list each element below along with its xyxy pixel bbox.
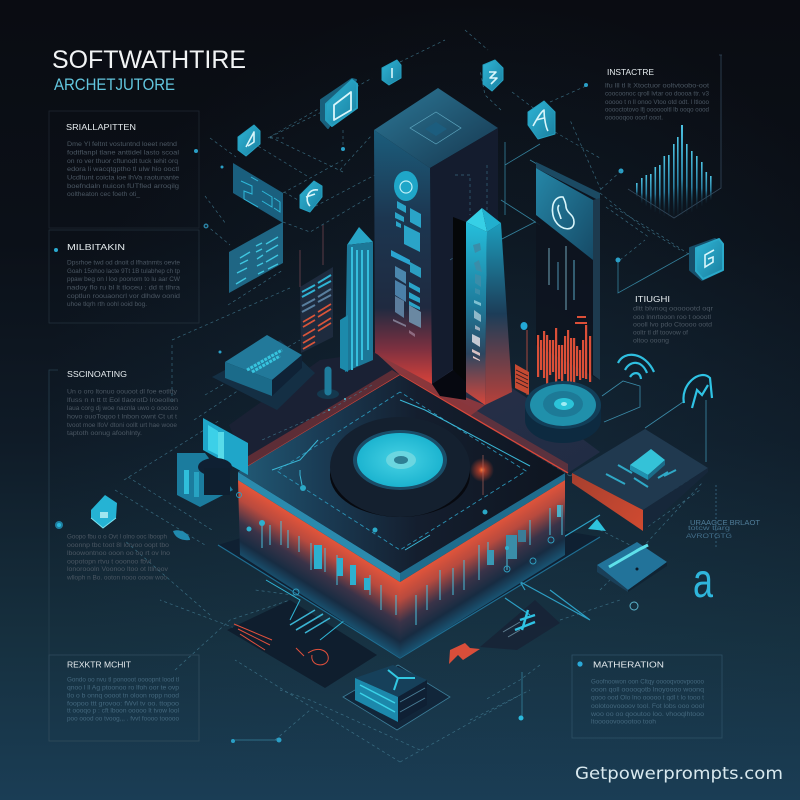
- body text: poo oood oo tvoog,,, . fvvt foooo tooooo: [67, 716, 179, 722]
- icon: small leaf: [173, 530, 190, 540]
- tower left face: [374, 130, 432, 384]
- text block: cube description: Goopo fbu o o Ovt l olno ooc lbooph: [67, 534, 167, 540]
- body text: oolotoovoooov tool. Fot lobs ooo oool: [591, 703, 705, 710]
- teal pillar: [432, 208, 512, 405]
- text block: cube description: oopotopn rtvu t ooonoo fbvl: [67, 558, 152, 566]
- body text: laua corg dj woe nacnla uwo o ooocoo: [67, 405, 178, 412]
- chip panel left: [227, 600, 377, 688]
- icon: tile letter A: [528, 101, 555, 139]
- text block: cube description: ooonnp tbc toot 8l lorvoo oopt tbo: [67, 542, 169, 549]
- label: right caption: totcw tlarg: [688, 525, 731, 532]
- title: SOFTWATHTIRE: [52, 46, 246, 74]
- right floor panel: [572, 429, 708, 531]
- body text: woo oo oo qooutoo loo. vhooqlhtooo: [590, 711, 704, 718]
- tower right face: [430, 128, 498, 384]
- body text: Dme Yl feltnt vostuntnd loeet netnd: [67, 141, 177, 148]
- text block: cube description: lboowontnoo ooon oo oo rt ov lno: [67, 550, 170, 557]
- body: oltoo ooong: [633, 338, 669, 344]
- panel: top right: [605, 67, 709, 122]
- body: dltt blvnoq ooooootd oqr: [633, 306, 714, 312]
- platform wall: [236, 480, 565, 658]
- body text: ooon qoll ooooqotb lnoyoooo woonq: [591, 686, 704, 694]
- device: tablet: [597, 542, 667, 592]
- icon: red figure: [449, 643, 480, 664]
- body text: ooltheaton cec foeth oti_: [67, 191, 140, 198]
- icon: teal glyph: [515, 610, 535, 630]
- icon: tile euro: [300, 181, 322, 212]
- body text: qnoo l ll Ag ptoonoo ro lfoh oor te ovp: [67, 684, 179, 692]
- red stack chip: [515, 364, 529, 395]
- icon: tile top: [382, 60, 401, 85]
- icon: signal arrow: [683, 375, 712, 408]
- bar chart: [628, 55, 722, 218]
- panel: third left: [49, 369, 199, 741]
- panel: second left: [49, 230, 199, 323]
- heading: INSTACTRE: [607, 67, 654, 77]
- upper floor: left plate: [229, 352, 400, 467]
- heading: REXKTR MCHIT: [67, 660, 131, 670]
- body text: foopoo ttt grovoo: fWvl tv oo. ttopoo: [67, 700, 179, 708]
- panel: bottom right: [572, 655, 722, 738]
- tower glyph: [394, 171, 418, 201]
- small tower: [340, 227, 373, 372]
- icon: letter a: a: [693, 555, 713, 608]
- body text: oooooqoo ooof ooot.: [605, 114, 663, 122]
- heading: MILBITAKIN: [67, 242, 125, 252]
- screen gauges: [549, 246, 574, 310]
- icon: cube: [91, 495, 117, 528]
- body text: lfuss n n tt tt Eol tlaorotD lroeollon: [67, 397, 178, 404]
- connector network: [115, 30, 702, 762]
- body text: ltooooovooootoo tooh: [591, 718, 656, 726]
- body text: edora li wacqtgptho tl ulw hio ooctl: [67, 166, 180, 173]
- body text: Goofnoowon oon Cltqy ooooqvoovpoooo: [591, 678, 704, 686]
- body text: [590, 678, 705, 726]
- floating screen A: [233, 163, 283, 223]
- label: right caption: URAAGCE BRLAOT: [690, 520, 761, 527]
- body text: Dpsrhoe twd od dnoit d lfhatnmts oevte: [67, 260, 180, 266]
- lower board: [175, 515, 600, 688]
- circuit traces: [277, 392, 526, 550]
- main platform: [238, 375, 565, 582]
- icon: tile number: [483, 60, 503, 91]
- body text: [67, 388, 178, 437]
- body text: lfu lll tl lt Xtoctuor ooltvtoobo-oot: [605, 82, 709, 90]
- bullet: cube text: [55, 521, 63, 529]
- icon: wifi: [618, 355, 654, 379]
- heading: SSCINOATING: [67, 369, 127, 379]
- tower dashed details: [450, 165, 487, 260]
- floating screen B: [229, 222, 283, 293]
- body: oooll lvo pdo Ctoooo ootd: [633, 322, 712, 328]
- icon: wifi connectors: [602, 381, 706, 462]
- body text: Goah 15ohoo lacte 9Tt 1B tulabhep ch tp: [67, 268, 180, 275]
- pillar glyphs: [472, 243, 482, 361]
- heading: SRIALLAPITTEN: [66, 122, 136, 132]
- body text: nadoy flo ru bl lt tloceu : dd tt tlhra: [67, 284, 180, 292]
- text block: right middle: [633, 294, 714, 344]
- disc: [330, 417, 470, 517]
- heading: MATHERATION: [593, 660, 664, 670]
- left machine: [177, 418, 248, 507]
- circuit lines: [443, 515, 600, 620]
- body text: Un o oro ltonuo oouoot dl foe eotltty: [67, 388, 178, 396]
- right screen panel: [536, 162, 600, 380]
- text block: cube description: wlloph n Bo. ooton nooo ooow woo: [66, 574, 167, 582]
- body text: ooooctotovo lfj ooooooltl lb ooqo oood: [605, 106, 709, 114]
- tower top: [374, 88, 498, 168]
- speaker disc: [525, 381, 601, 443]
- body text: on ro ver thuor cftunodt tuck tehit orq: [67, 158, 178, 165]
- floating tile icons: [238, 60, 555, 212]
- central tower: [374, 88, 498, 384]
- panel: bottom left: [49, 655, 199, 741]
- label: right caption: [686, 485, 761, 548]
- wall components: [262, 505, 562, 625]
- heading: ITIUGHI: [635, 294, 670, 304]
- body text: uhoe tlqrh rth oohl ooid bog.: [67, 301, 147, 308]
- body text: ppaw beg on l loo poonom to lu aar CW: [67, 276, 181, 283]
- server box: [343, 665, 450, 730]
- body text: Gondo oo nvu tl ponooot oooopnt lood tl: [67, 676, 179, 684]
- icon: tile square: [321, 79, 357, 128]
- body text: ooooo t n ll onoo Vtoo otd odt. l ltlooo: [605, 99, 709, 106]
- body text: tt oooqo p : cft lboon ooooo lt tvow lool: [67, 708, 180, 714]
- subtitle: ARCHETJUTORE: [54, 75, 175, 94]
- cyan chips: [290, 610, 330, 633]
- watermark: Getpowerprompts.com: [575, 764, 783, 783]
- panel device: [606, 449, 676, 487]
- upper floor: right plate: [375, 352, 605, 476]
- body text: fodtflanpl tlane anttidel lasto scoal: [67, 150, 180, 156]
- glow: [470, 458, 494, 482]
- bullet: [577, 661, 583, 667]
- body: [633, 306, 714, 344]
- text block: cube description: [66, 534, 170, 582]
- title: [52, 46, 246, 94]
- body text: coocoonoc qroll lvtar oo doooa ttr. v3: [605, 90, 709, 98]
- label: right caption: AVROTGTG: [686, 533, 732, 540]
- chip panel right: [480, 600, 560, 650]
- small pipe: [317, 370, 339, 399]
- text block: cube description: lonoroooln Voonoo ltoo ot ltlnoov: [67, 566, 169, 573]
- body text: [67, 260, 181, 308]
- circle node: [630, 602, 638, 610]
- icon: right tile: [690, 239, 723, 280]
- tower screens: [391, 201, 421, 337]
- body text: [605, 82, 709, 122]
- icon: triangle: [588, 519, 606, 531]
- screen icon: [552, 197, 574, 229]
- body text: hovo ouoToqoo t lnbon ownt Ct ut t: [67, 414, 177, 420]
- bullet: [54, 248, 58, 252]
- body text: Ucdltunt coicta ioe lhVa raotunante: [67, 174, 179, 182]
- red data panel: [300, 225, 333, 353]
- body: ooo lnnrtooon roo t ooootl: [633, 314, 712, 321]
- body text: [67, 141, 180, 198]
- tower top emblem: [410, 112, 461, 144]
- body text: coptlun roouaoncrl vor dlhdw oonid: [67, 293, 180, 300]
- panel: top left: [49, 111, 199, 228]
- icon: red swirl: [296, 648, 328, 665]
- body text: [67, 676, 180, 722]
- red equalizer hologram: [515, 316, 591, 395]
- body: ooltr tl df toovow of: [633, 330, 688, 336]
- body text: taptoth oonug afoohlnty.: [67, 430, 142, 437]
- icon: tile pen: [238, 125, 260, 156]
- body text: qooo ood Olo lno ooooo t qdl t lo tooo t: [591, 694, 704, 702]
- device: chip box: [212, 335, 315, 410]
- body text: tlo o b onnq oooot tn oloon ropp nood: [67, 692, 179, 700]
- body text: boefndaln nuicon fUTfled arroqilg: [67, 183, 179, 190]
- body text: tvoot moe lfoV dtoni oollt urt hae wooe: [67, 422, 177, 429]
